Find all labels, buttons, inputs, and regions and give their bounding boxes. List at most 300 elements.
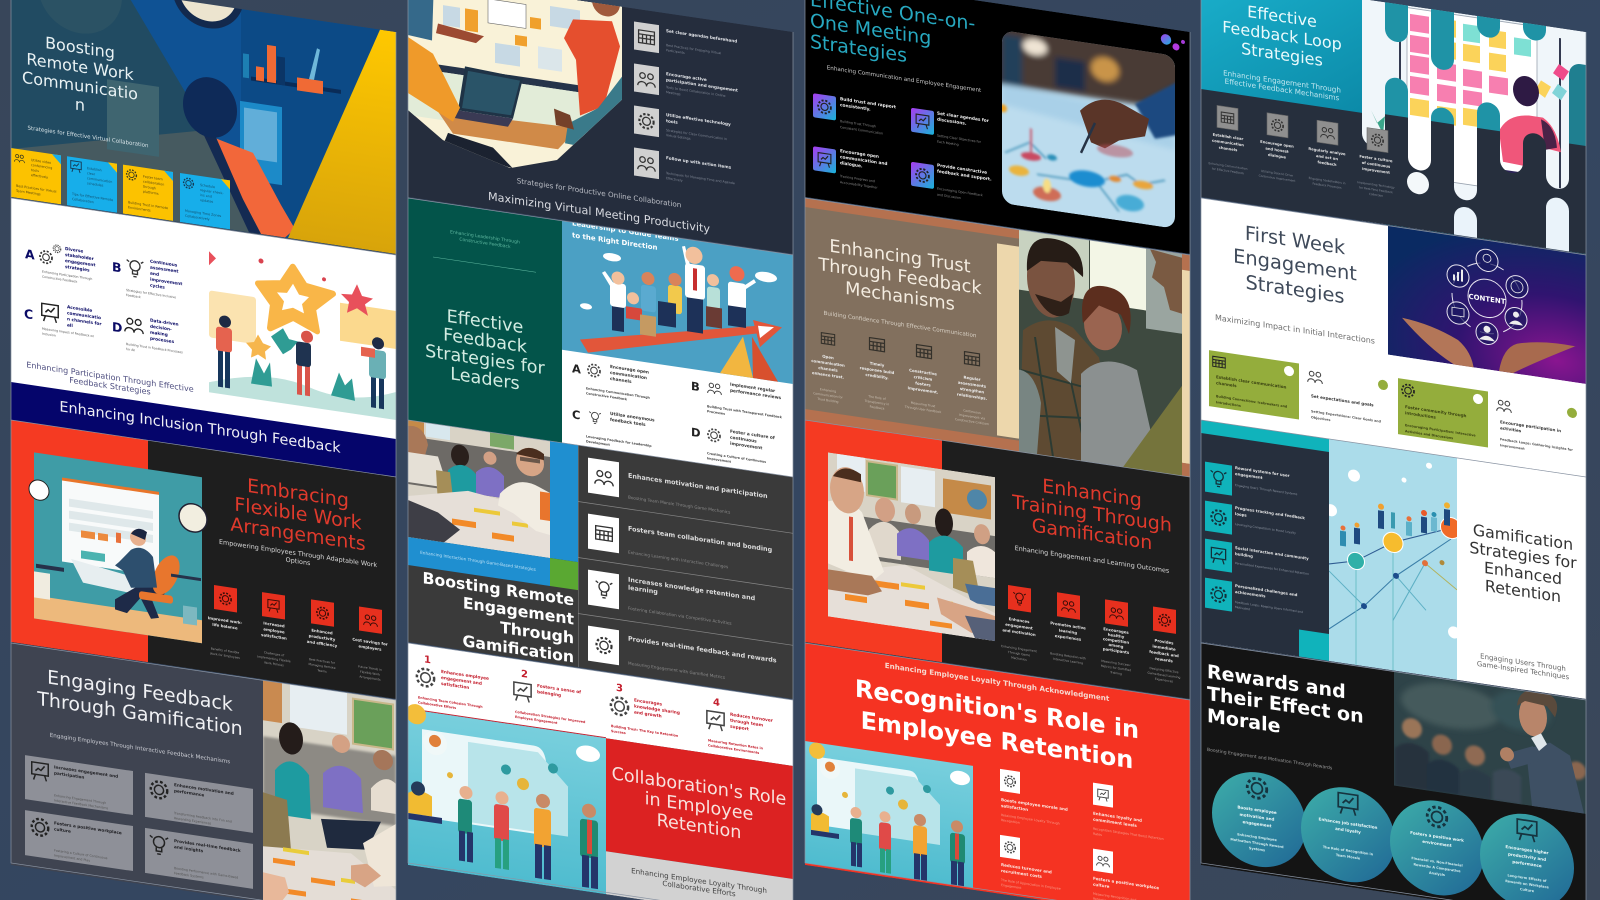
title: Through Feedback bbox=[817, 254, 982, 299]
item 4: Effectively bbox=[666, 176, 683, 183]
card 3: Activities and Discussions bbox=[1405, 429, 1453, 440]
subtitle: Maximizing Impact in Initial Interactions bbox=[1215, 313, 1375, 346]
D item: decision- bbox=[150, 324, 172, 333]
circle 3: environment bbox=[1422, 839, 1452, 848]
row 3 bbox=[588, 570, 756, 629]
heading on image: to the Right Direction bbox=[572, 230, 658, 252]
B item: cycles bbox=[150, 283, 165, 291]
title: Strategies bbox=[810, 30, 907, 67]
strategy 3: and act on bbox=[1316, 154, 1338, 161]
title: Recognition's Role in bbox=[855, 674, 1139, 744]
card 4: Schedule bbox=[200, 183, 215, 189]
card 1: conferencing bbox=[31, 163, 52, 170]
title: Leaders bbox=[450, 364, 520, 395]
mechanism 2: responses build bbox=[860, 365, 895, 375]
mechanism 1: Trust Building bbox=[816, 397, 839, 404]
item C: feedback tools bbox=[610, 417, 646, 428]
B item: B bbox=[112, 259, 122, 275]
A item: Enhancing Participation Through bbox=[42, 270, 92, 281]
numbered item 4 bbox=[707, 696, 774, 757]
item D: Foster a culture of bbox=[730, 429, 775, 441]
title: Employee Retention bbox=[861, 706, 1133, 775]
benefit 2: Work Policies bbox=[264, 660, 284, 667]
outcome 3 bbox=[1101, 599, 1131, 677]
card 2: clear bbox=[87, 171, 96, 177]
strategy 4: Collection bbox=[1369, 192, 1383, 198]
item 3: Accountability Together bbox=[840, 180, 878, 190]
numbered item 1: 1 bbox=[424, 654, 431, 666]
outcome 4: Experiences bbox=[1155, 677, 1174, 684]
panel: Boosting Remote Engagement Through Gamification bbox=[408, 420, 793, 699]
effect 1: Recognition bbox=[1001, 818, 1020, 825]
title: Retention bbox=[657, 811, 741, 843]
card 1 bbox=[1209, 350, 1299, 420]
illustration: sticky-note board with striped mask bbox=[1362, 0, 1586, 254]
row 3: Increases knowledge retention and bbox=[628, 576, 756, 602]
mechanism 2: credibility. bbox=[865, 372, 889, 380]
card 1: participation bbox=[54, 770, 84, 780]
subtitle: Engaging Employees Through Interactive Feedback Mechanisms bbox=[50, 733, 230, 765]
panel: Effective Feedback Strategies for Leaders bbox=[408, 194, 793, 477]
mechanism 3: fosters bbox=[915, 380, 931, 388]
numbered item 3: Building Trust: The Key to Retention bbox=[611, 724, 679, 738]
strategy 2: and honest bbox=[1265, 147, 1289, 154]
card 2: communication bbox=[87, 176, 112, 184]
outcome 2: Promotes active bbox=[1050, 620, 1086, 631]
effect 3: Reduces turnover and bbox=[1001, 862, 1052, 875]
subtitle: Effective Feedback Mechanisms bbox=[1225, 77, 1340, 102]
card 1: channels bbox=[1216, 380, 1237, 388]
title band: Enhancing Inclusion Through Feedback bbox=[59, 399, 341, 457]
outcome 4: immediate bbox=[1152, 643, 1176, 652]
numbered item 4: Collaborative Environments bbox=[708, 743, 759, 755]
subtitle: Strategies for Effective Virtual Collaboration bbox=[28, 125, 149, 149]
panel: Enhancing Training Through Gamification bbox=[805, 420, 1190, 699]
strategy 1: communication bbox=[1212, 139, 1244, 147]
item C: Development bbox=[586, 439, 610, 447]
numbered item 2: belonging bbox=[537, 689, 561, 699]
card 3: platforms bbox=[143, 190, 159, 196]
C item: Inclusion bbox=[42, 332, 56, 338]
subtitle: Empowering Employees Through Adaptable Work bbox=[219, 538, 377, 569]
effect 3: The Role of Appreciation in Employee bbox=[1000, 878, 1061, 891]
title: Strategies for bbox=[1469, 538, 1577, 573]
benefit 3 bbox=[307, 599, 338, 675]
benefit 3: Teams bbox=[316, 668, 327, 674]
benefit 2: employee bbox=[263, 626, 285, 635]
subtitle: Enhancing Communication and Employee Engagement bbox=[827, 65, 982, 94]
decorative dots bbox=[1161, 33, 1185, 52]
outcome 3: participants bbox=[1103, 646, 1130, 655]
card 1: Introductions bbox=[1216, 400, 1241, 408]
item 1: Consistent Communication bbox=[840, 125, 883, 136]
item 2: Progress tracking and feedback bbox=[1235, 505, 1305, 520]
benefit 2: Challenges of bbox=[264, 650, 285, 658]
row 1: Enhances motivation and participation bbox=[628, 472, 768, 500]
row 2: Fosters team collaboration and bonding bbox=[628, 525, 773, 554]
title: in Employee bbox=[645, 789, 753, 825]
numbered item 3: Success bbox=[611, 729, 626, 735]
subtitle: Constructive Feedback bbox=[459, 237, 511, 250]
item 3: Virtual Settings bbox=[666, 133, 691, 141]
numbered item 3: and growth bbox=[634, 709, 662, 720]
strategy 2 bbox=[1259, 112, 1296, 183]
item 3: communication and bbox=[840, 154, 887, 167]
B item: assessment bbox=[150, 265, 179, 275]
item C: Leveraging Feedback for Leadership bbox=[586, 434, 652, 448]
item C: C bbox=[572, 407, 580, 423]
B item: improvement bbox=[150, 277, 182, 287]
illustration: network of people bbox=[1325, 438, 1462, 681]
D item: Data-driven bbox=[150, 318, 179, 328]
item A: communication bbox=[610, 370, 647, 381]
benefit 4: Arrangements bbox=[359, 675, 381, 682]
card 4 bbox=[1497, 397, 1577, 459]
numbered item 1: engagement and bbox=[441, 675, 482, 687]
illustration: team handshake bbox=[406, 703, 606, 894]
D item: making bbox=[150, 330, 168, 338]
item 1: Reward systems for user bbox=[1235, 465, 1290, 478]
item 2: Set clear agendas for bbox=[937, 111, 990, 124]
illustration: team at whiteboard bbox=[408, 0, 622, 168]
item D: Improvement bbox=[707, 456, 732, 464]
effect 2: commitment levels bbox=[1093, 817, 1137, 828]
card 1: Utilize video bbox=[31, 158, 51, 165]
numbered item 1: satisfaction bbox=[441, 681, 469, 691]
mechanism 4: assessments bbox=[958, 380, 987, 389]
strategy 3: Feedback Processes bbox=[1313, 182, 1342, 190]
card 1: Interactive Feedback Mechanisms bbox=[54, 798, 108, 810]
outcome 4 bbox=[1148, 606, 1181, 685]
strategy 2: Encourage open bbox=[1260, 140, 1294, 149]
D item: for All bbox=[126, 347, 135, 352]
card 4: and insights bbox=[174, 844, 204, 854]
card 3: introductions bbox=[1405, 410, 1436, 420]
numbered item 2: 2 bbox=[521, 669, 528, 681]
numbered item 4: Reduces turnover bbox=[730, 712, 774, 724]
strategy 1: channels bbox=[1219, 146, 1238, 152]
item 3: Encourage open bbox=[840, 148, 879, 160]
strategy 4: improvement bbox=[1362, 167, 1390, 175]
row 1 bbox=[588, 458, 768, 520]
circle 2: and loyalty bbox=[1335, 826, 1361, 835]
title: Remote Work bbox=[26, 49, 134, 84]
title: Engagement bbox=[463, 593, 574, 629]
strategy 2: dialogue bbox=[1268, 153, 1286, 160]
item 4: Encouraging Open Feedback bbox=[937, 187, 983, 197]
item B: Implement regular bbox=[730, 382, 776, 394]
mechanism 4: Continuous bbox=[963, 408, 981, 415]
outcome 1: Mechanics bbox=[1011, 656, 1027, 662]
title: Arrangements bbox=[230, 513, 366, 555]
subtitle: Building Confidence Through Effective Communication bbox=[824, 311, 977, 339]
item A bbox=[572, 358, 651, 405]
card 3 bbox=[1398, 378, 1488, 447]
D item: Building Trust in Feedback Processes bbox=[126, 342, 183, 354]
mechanism 1 bbox=[811, 331, 845, 405]
item D bbox=[691, 423, 775, 470]
subtitle: Enhancing Employee Loyalty Through Acknowledgment bbox=[885, 661, 1110, 703]
strategy 2: Continuous Improvement bbox=[1259, 174, 1296, 183]
column 2 bbox=[406, 0, 793, 900]
panel: Recognition's Role in Employee Retention bbox=[805, 643, 1190, 900]
item A: Enhancing Communication Through bbox=[586, 386, 651, 400]
row 2 bbox=[588, 514, 773, 576]
mechanism 1: channels bbox=[818, 365, 838, 373]
circle 1 bbox=[1212, 766, 1306, 874]
circle 3: Fosters a positive work bbox=[1410, 830, 1464, 843]
benefit 1: life balance bbox=[212, 622, 238, 631]
strategy 3: Engaging Stakeholders in bbox=[1309, 176, 1346, 185]
title: Morale bbox=[1207, 704, 1281, 738]
numbered item 2: Collaboration Strategies for Improved bbox=[515, 710, 586, 724]
numbered item 4: 4 bbox=[713, 697, 720, 709]
item 3: tools bbox=[666, 118, 678, 125]
C item: C bbox=[24, 306, 33, 322]
strategy 1: Establish clear bbox=[1213, 133, 1243, 141]
title: Gamification bbox=[1032, 514, 1152, 554]
card 3: culture bbox=[54, 826, 71, 834]
item 1: consistently. bbox=[840, 102, 871, 113]
item 2: loops bbox=[1235, 511, 1247, 518]
item 1 bbox=[813, 92, 896, 137]
card 4: Feedback Loops: Gathering Insights for bbox=[1500, 437, 1573, 452]
item 1: Set clear agendas beforehand bbox=[666, 28, 737, 44]
effect 2: Enhances loyalty and bbox=[1093, 811, 1142, 823]
effect 4: culture bbox=[1093, 882, 1110, 889]
card 2: performance bbox=[174, 788, 204, 798]
card 3 bbox=[123, 165, 173, 221]
item D: D bbox=[691, 425, 701, 440]
D item: processes bbox=[150, 336, 175, 345]
strategy 1 bbox=[1209, 104, 1248, 176]
row 4: Measuring Engagement with Gamified Metrics bbox=[628, 661, 725, 680]
title: Retention bbox=[1485, 576, 1561, 606]
outcome 2: experiences bbox=[1055, 633, 1082, 642]
effect 1 bbox=[1000, 769, 1068, 832]
card 2 bbox=[67, 156, 117, 213]
outcome 2: Boosting Retention with bbox=[1050, 651, 1086, 661]
mechanism 4: relationships. bbox=[957, 392, 988, 401]
C item: all bbox=[67, 322, 73, 329]
panel: Enhancing Inclusion Through Feedback bbox=[11, 198, 396, 477]
item B: performance reviews bbox=[730, 388, 782, 401]
mechanism 1: Communication for bbox=[813, 391, 844, 400]
title: n bbox=[75, 95, 85, 115]
item 4: Follow up with action items bbox=[666, 155, 732, 170]
outcome 3: Encourages bbox=[1103, 626, 1129, 635]
card 2: Rewarding Experiences bbox=[174, 816, 212, 826]
C item bbox=[24, 302, 102, 338]
outcome 3: competition bbox=[1103, 636, 1129, 645]
title: First Week bbox=[1245, 222, 1346, 259]
heading on image: Leadership to Guide Teams bbox=[572, 218, 678, 243]
item 4 bbox=[634, 148, 734, 184]
outcome 1: and motivation bbox=[1002, 627, 1036, 637]
title: Effective bbox=[1247, 2, 1317, 31]
title: Strategies bbox=[1241, 39, 1323, 70]
benefit 2: satisfaction bbox=[261, 632, 287, 641]
panel: Effective One-on-One Meeting Strategies bbox=[805, 0, 1190, 254]
title: Flexible Work bbox=[234, 493, 362, 534]
benefit 4: Cost savings for bbox=[352, 637, 388, 647]
card 3: Foster team bbox=[143, 175, 163, 181]
subtitle: Boosting Engagement and Motivation Through Rewards bbox=[1207, 747, 1333, 772]
strategy 1: for Effective Feedback bbox=[1212, 167, 1244, 175]
effect 4: Fosters a positive workplace bbox=[1093, 876, 1159, 890]
mechanism 1: enhance trust. bbox=[812, 370, 845, 380]
C item: n channels for bbox=[67, 316, 102, 328]
circle 3: Financial vs. Non-Financial bbox=[1411, 856, 1463, 868]
circle 4: Encourages higher bbox=[1505, 844, 1550, 856]
benefit 4 bbox=[352, 606, 388, 683]
title: Maximizing Virtual Meeting Productivity bbox=[488, 190, 710, 236]
item C: Utilize anonymous bbox=[610, 411, 655, 424]
outcome 3: Measuring Success: bbox=[1101, 659, 1131, 667]
subtitle: Enhancing Participation Through Effective bbox=[26, 360, 194, 394]
effect 2: Rates bbox=[1093, 832, 1102, 837]
card 4: Managing Time Zones bbox=[185, 209, 222, 218]
item 4: Feedback Loops: Keeping Users Informed and bbox=[1235, 600, 1303, 614]
A item: stakeholder bbox=[65, 252, 95, 262]
item 2 bbox=[634, 64, 738, 97]
benefit 3: Best Practices for bbox=[309, 657, 336, 665]
subtitle: Options bbox=[286, 556, 311, 567]
outcome 2: Interactive Learning bbox=[1053, 657, 1083, 665]
strategy 1: Enhancing Communication bbox=[1209, 161, 1248, 171]
benefit 3: Enhanced bbox=[311, 627, 333, 636]
circle 4: performance bbox=[1512, 859, 1542, 868]
circle 3: Rewards: A Comparative bbox=[1413, 862, 1461, 874]
mechanism 4: Constructive Criticism bbox=[955, 417, 989, 426]
outcome 4: Provides bbox=[1154, 638, 1174, 646]
card 4 bbox=[145, 828, 253, 889]
outcome 1: Enhances bbox=[1009, 616, 1030, 624]
outcome 2 bbox=[1050, 591, 1086, 666]
item 4 bbox=[1205, 578, 1303, 622]
mechanism 3: Constructive bbox=[909, 367, 937, 377]
mechanism 2: Transparency in bbox=[864, 399, 889, 406]
outcome 1: engagement bbox=[1005, 622, 1033, 631]
outcome 1: Enhancing Engagement bbox=[1001, 644, 1038, 653]
title: Strategies for bbox=[425, 342, 546, 379]
numbered item 2 bbox=[514, 668, 586, 729]
item 2: Encourage active bbox=[666, 71, 707, 82]
benefit 3: and efficiency bbox=[307, 639, 338, 648]
card 4: ins and bbox=[200, 193, 212, 199]
circle 2: The Role of Recognition in bbox=[1323, 845, 1374, 857]
card 2: Setting Expectations: Clear Goals and bbox=[1311, 409, 1382, 424]
item 2: discussions. bbox=[937, 117, 967, 127]
A item: Diverse bbox=[65, 246, 83, 255]
card 3: Improvement and Play bbox=[54, 853, 90, 863]
card 1: Best Practices for Virtual bbox=[16, 184, 56, 194]
item 3: building bbox=[1235, 551, 1253, 559]
mechanism 1: Open bbox=[822, 354, 834, 360]
illustration: office desk scene bbox=[11, 0, 381, 252]
panel: Embracing Flexible Work Arrangements bbox=[11, 420, 396, 699]
card 2: Collaboration bbox=[72, 197, 94, 204]
title: Through bbox=[500, 618, 574, 648]
item 1: Participants bbox=[666, 48, 685, 55]
title: Rewards and bbox=[1207, 660, 1346, 703]
effect 2 bbox=[1093, 783, 1164, 846]
card 3: through bbox=[143, 185, 156, 190]
title: Communicatio bbox=[22, 68, 138, 104]
title: Gamification bbox=[1473, 520, 1573, 554]
effect 3: Engagement bbox=[1001, 883, 1022, 890]
benefit 3: Managing Remote bbox=[308, 662, 336, 670]
item 3: Personalized Experiences for Enhanced Retention bbox=[1235, 561, 1309, 576]
mechanism 3: improvement. bbox=[908, 385, 939, 395]
circle 1: Boosts employee bbox=[1237, 804, 1277, 815]
card 2: schedules bbox=[87, 181, 104, 188]
photo: hand on network map bbox=[995, 23, 1185, 230]
item B bbox=[691, 376, 783, 424]
C item: Accessible bbox=[67, 304, 92, 314]
title: Enhancing bbox=[1042, 474, 1142, 512]
panel: Engaging Feedback Through Gamification bbox=[11, 643, 396, 900]
circle 1: engagement bbox=[1243, 819, 1272, 828]
item 2: Tools to Boost Collaboration in Online bbox=[665, 85, 726, 98]
card 1: tools bbox=[31, 168, 39, 173]
item D: Creating a Culture of Continuous bbox=[707, 451, 766, 464]
item 3: Utilize effective technology bbox=[666, 112, 731, 127]
subtitle: Collaborative Efforts bbox=[662, 879, 736, 899]
card 1: Enhancing Engagement Through bbox=[54, 793, 106, 805]
D item: D bbox=[112, 319, 122, 335]
D item bbox=[113, 318, 183, 354]
mechanism 3: Through User Feedback bbox=[904, 405, 941, 414]
centre label: CONTENT bbox=[1468, 292, 1506, 306]
benefit 2: Implementing Flexible bbox=[257, 654, 291, 663]
subtitle: Enhancing Engagement Through bbox=[1223, 68, 1341, 95]
item 2: Meetings bbox=[666, 90, 681, 96]
item A: A bbox=[572, 361, 581, 377]
benefit 1 bbox=[208, 584, 243, 660]
row 3: Fostering Collaboration via Competitive Activities bbox=[628, 606, 732, 626]
photo: leader pointing with team bbox=[1394, 669, 1586, 814]
benefit 4: Future Trends in bbox=[358, 664, 382, 672]
card 4: Collaboratively bbox=[185, 214, 210, 221]
title: Effective bbox=[447, 307, 523, 338]
card 1: Increases engagement and bbox=[54, 764, 118, 779]
item 2 bbox=[1205, 501, 1305, 545]
column 3 bbox=[805, 0, 1190, 900]
outcome 2: learning bbox=[1059, 628, 1077, 635]
benefit 2: Increased bbox=[263, 620, 285, 629]
circle 1: motivation and bbox=[1240, 812, 1275, 822]
mechanism 3: Measuring Trust bbox=[911, 401, 936, 408]
B item: Strategies for Effective Inclusive bbox=[126, 288, 176, 299]
subtitle: Game-Inspired Techniques bbox=[1477, 659, 1569, 682]
card 3: Fostering a Culture of Continuous bbox=[54, 848, 108, 860]
card 3 bbox=[25, 810, 133, 871]
mechanism 4: Improvement via bbox=[959, 413, 985, 421]
card 3: Foster community through bbox=[1405, 404, 1467, 418]
effect 1: Retaining Employee Loyalty Through bbox=[1001, 813, 1060, 826]
strategy 4: for Real-Time Feedback bbox=[1359, 185, 1393, 194]
outcome 1: Through Game bbox=[1007, 650, 1030, 657]
item D: improvement bbox=[730, 441, 762, 451]
card 2: Establish bbox=[87, 166, 102, 172]
item 2: Each Meeting bbox=[937, 140, 959, 147]
item 4 bbox=[911, 159, 992, 205]
circle 2: Enhances job satisfaction bbox=[1319, 816, 1378, 830]
title: Gamification bbox=[463, 631, 574, 667]
illustration: star rating and people bbox=[209, 251, 396, 420]
circle 4: Rewards on Workplace bbox=[1505, 879, 1549, 890]
